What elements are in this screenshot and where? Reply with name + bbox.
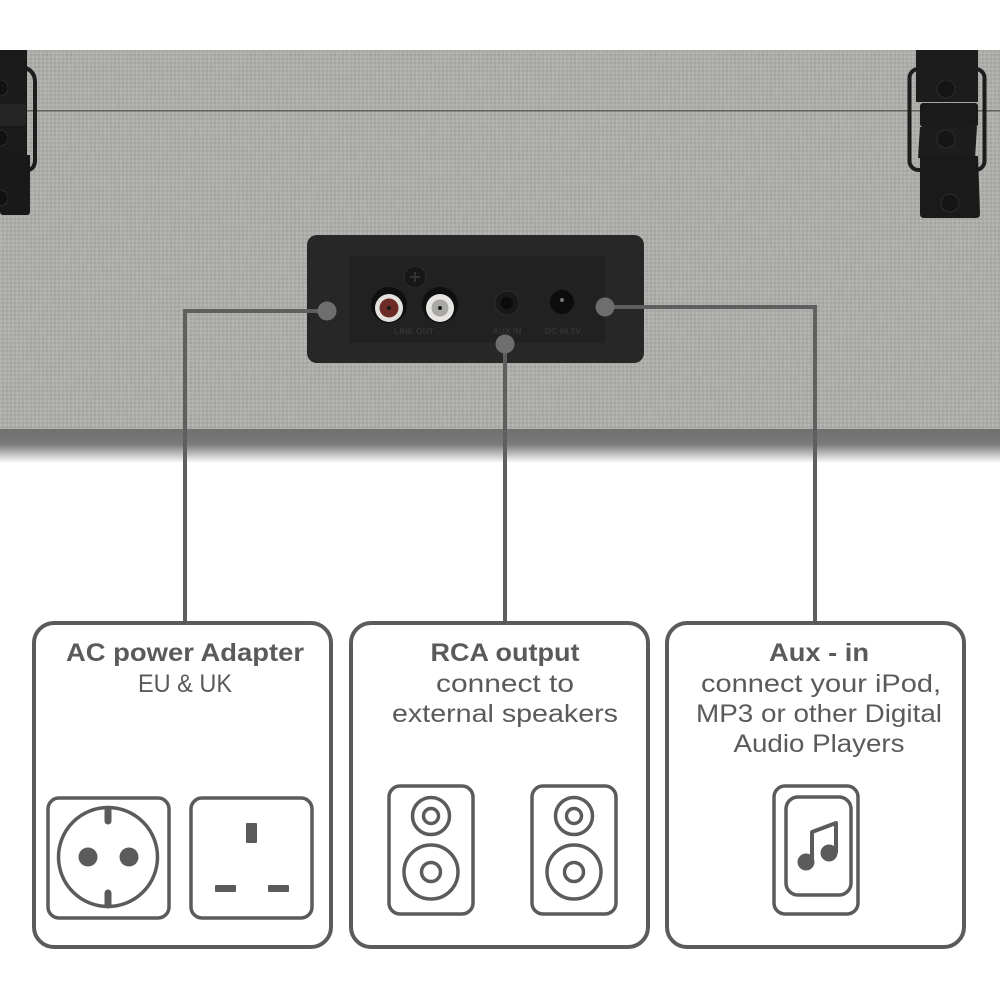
connector panel <box>307 235 644 363</box>
panel: RCA output <box>351 623 648 947</box>
red RCA socket <box>371 287 407 323</box>
icon: UK socket <box>191 798 312 918</box>
heading: RCA output: RCA output <box>430 639 580 667</box>
icon: EU socket <box>48 798 169 918</box>
screw <box>404 266 426 288</box>
text: Audio Players: Audio Players <box>734 730 904 758</box>
white RCA socket <box>422 287 458 323</box>
latch clasp <box>920 156 980 218</box>
icon: left speaker <box>389 786 473 914</box>
latch strap <box>916 50 978 102</box>
icon: music player <box>774 786 858 914</box>
lid seam <box>0 110 1000 112</box>
text: external speakers: external speakers <box>392 700 618 728</box>
latch strap <box>0 50 30 215</box>
socket labels <box>394 326 581 336</box>
latch loop <box>910 69 984 170</box>
left latch <box>0 50 35 215</box>
fabric case <box>0 50 1000 429</box>
turntable case photo <box>0 50 1000 463</box>
latch loop <box>26 68 35 170</box>
text: connect to: connect to <box>436 670 574 698</box>
DC socket <box>550 290 574 314</box>
connector line: Aux in <box>596 298 815 622</box>
connector line: RCA output <box>496 334 514 622</box>
heading: Aux - in: Aux - in <box>769 639 869 667</box>
text: EU & UK: EU & UK <box>138 670 232 698</box>
socket labels: AUX IN <box>493 326 521 336</box>
text: MP3 or other Digital: MP3 or other Digital <box>696 700 942 728</box>
connector line: AC power <box>185 302 336 622</box>
icon: right speaker <box>532 786 616 914</box>
panel: Aux in <box>667 623 964 947</box>
hinge <box>920 103 978 127</box>
panel plate <box>307 235 644 363</box>
panel recess <box>348 255 606 344</box>
heading: AC power Adapter: AC power Adapter <box>66 639 304 667</box>
aux socket <box>495 291 519 315</box>
right latch <box>910 50 984 218</box>
case shadow <box>0 429 1000 463</box>
text: connect your iPod,: connect your iPod, <box>701 670 941 698</box>
socket labels: DC IN 5V <box>545 326 581 336</box>
panel: AC power adapter <box>34 623 331 947</box>
socket labels: LINE OUT <box>394 326 435 336</box>
